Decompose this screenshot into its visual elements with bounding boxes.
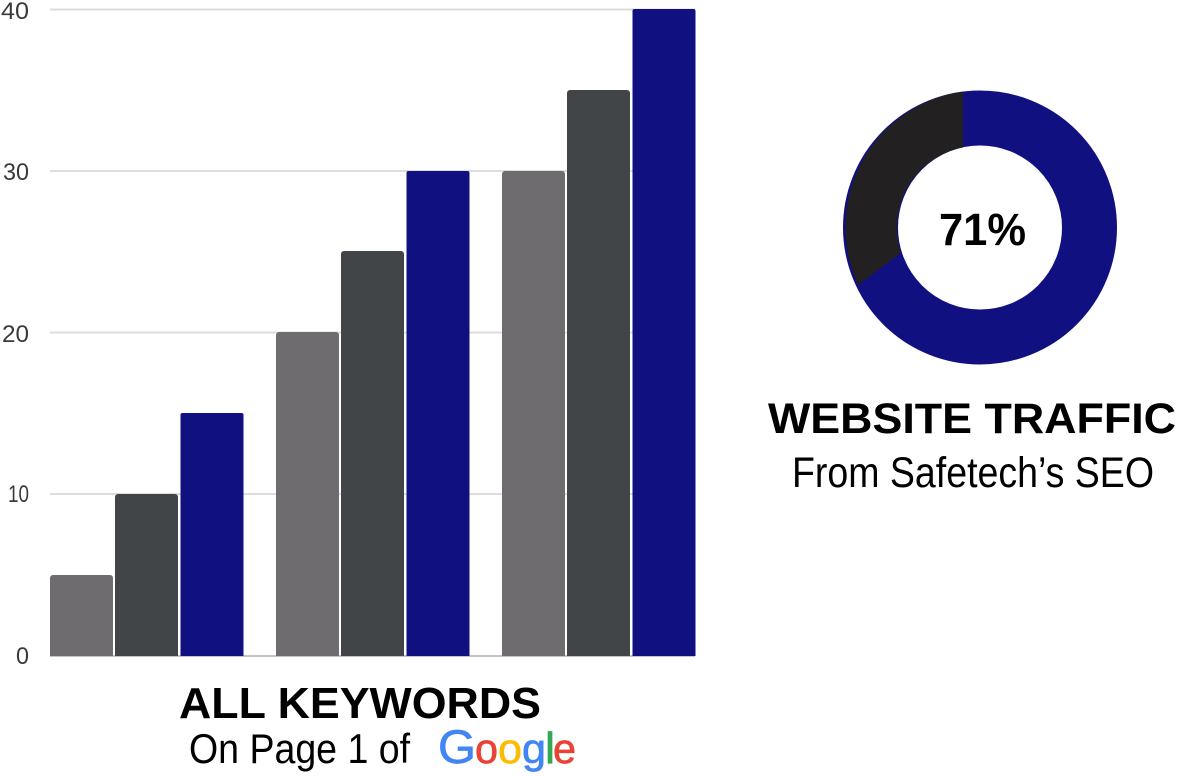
logo: google wordmark: o: [498, 725, 522, 772]
y axis labels: [1, 0, 29, 670]
y axis labels: 30: [3, 159, 29, 186]
donut dark segment: [845, 92, 963, 285]
subheading: on page 1 of: On Page 1 of: [189, 725, 410, 772]
donut chart: website traffic 71%: [845, 92, 1090, 337]
subheading: from safetech's seo: From Safetech’s SEO: [792, 449, 1154, 497]
heading: all keywords: ALL KEYWORDS: [179, 679, 541, 728]
panel: keywords bar chart: [1, 0, 696, 670]
bar group 1: [50, 413, 244, 656]
bar group 3: [502, 9, 696, 656]
y axis labels: 0: [16, 643, 29, 670]
logo: google wordmark: G: [438, 720, 476, 773]
y axis labels: 20: [2, 321, 29, 348]
logo: google wordmark: o: [475, 725, 498, 772]
logo: google wordmark: e: [553, 725, 576, 772]
heading: website traffic: WEBSITE TRAFFIC: [768, 395, 1176, 443]
bar group 2: [276, 171, 470, 656]
logo: google wordmark: g: [522, 725, 546, 772]
logo: google wordmark: l: [545, 724, 555, 773]
logo: google wordmark: [438, 720, 576, 773]
donut centre value: 71%: [939, 204, 1026, 255]
y axis labels: 10: [8, 481, 29, 508]
